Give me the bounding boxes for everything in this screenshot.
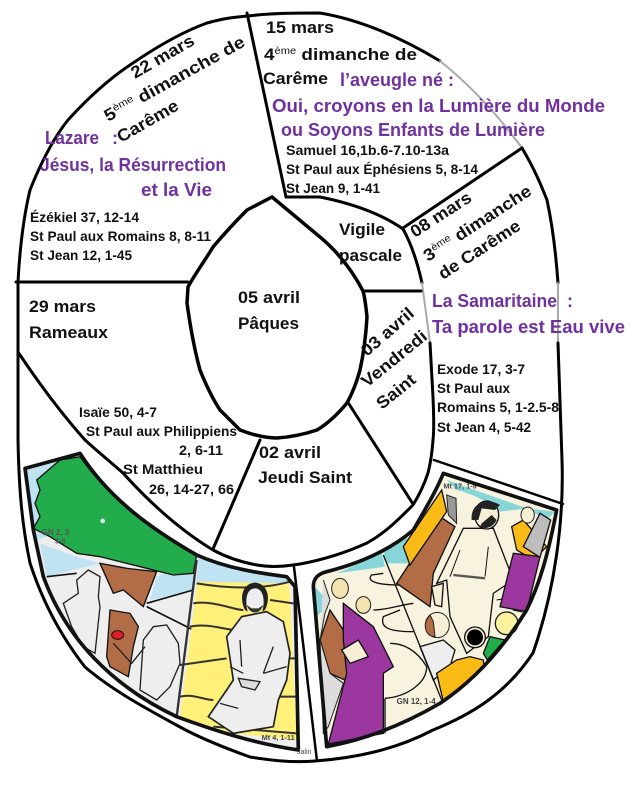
center label: 05 avril Pâques: Pâques bbox=[238, 314, 299, 333]
segment: 03 avril Vendredi Saint: Saint bbox=[373, 370, 420, 413]
segment: 15 mars: Carême bbox=[263, 69, 328, 88]
illustration: Adam and Eve, temptation of Jesus: 3-5 bbox=[55, 536, 66, 545]
segment: 15 mars: 4 bbox=[264, 45, 273, 64]
segment: 15 mars: 15 mars bbox=[266, 18, 334, 37]
segment: 22 mars: : bbox=[112, 128, 118, 148]
segment: 15 mars: ème bbox=[275, 46, 297, 57]
segment: 22 mars: St Jean 12, 1-45 bbox=[30, 247, 132, 263]
segment: 08 mars: St Jean 4, 5-42 bbox=[437, 419, 531, 435]
segment: 08 mars: 3 bbox=[420, 244, 438, 265]
segment: 08 mars: Ta parole est Eau vive bbox=[432, 317, 625, 337]
segment: 22 mars: et la Vie bbox=[141, 180, 212, 200]
tree trunk bbox=[100, 563, 157, 677]
sky bbox=[27, 457, 290, 600]
Elijah bbox=[512, 520, 547, 560]
segment: 08 mars bbox=[407, 181, 625, 435]
segment: Vigile pascale: pascale bbox=[339, 246, 402, 265]
segment: 15 mars: St Jean 9, 1-41 bbox=[286, 180, 380, 196]
segment: 29 mars Rameaux: Rameaux bbox=[29, 323, 109, 342]
segment: 22 mars: 5 bbox=[101, 104, 118, 125]
path lines bbox=[370, 573, 427, 733]
Adam bbox=[63, 570, 100, 653]
Eve bbox=[140, 625, 180, 700]
center label: 05 avril Pâques: 05 avril bbox=[238, 288, 300, 307]
illustration: Transfiguration and call of Abraham: GN 12, 1-4 bbox=[397, 697, 436, 706]
segment: 22 mars: Jésus, la Résurrection bbox=[40, 155, 226, 175]
segment: 08 mars: Romains 5, 1-2.5-8 bbox=[437, 399, 559, 415]
Moses bbox=[397, 517, 455, 607]
center label: 05 avril Pâques bbox=[238, 288, 300, 333]
Jesus robe bbox=[437, 528, 513, 653]
segment: 22 mars: Ézékiel 37, 12-14 bbox=[30, 209, 139, 225]
segment: 29 mars Rameaux: Isaïe 50, 4-7 bbox=[79, 404, 157, 420]
segment: 08 mars: dimanche bbox=[447, 181, 535, 248]
teal sky bbox=[315, 480, 555, 617]
segment: 15 mars: l’aveugle né : bbox=[340, 70, 454, 90]
illustration: Adam and Eve, temptation of Jesus: Mt 4, 1-11 bbox=[262, 733, 295, 742]
hills bbox=[47, 573, 193, 630]
segment: 08 mars: La Samaritaine bbox=[432, 291, 557, 311]
illustration: Transfiguration and call of Abraham bbox=[313, 473, 557, 747]
segment: 29 mars Rameaux bbox=[29, 297, 237, 497]
apple bbox=[112, 631, 124, 639]
center circle: Pâques bbox=[187, 197, 367, 438]
segment: 29 mars Rameaux: 29 mars bbox=[29, 297, 96, 316]
segment: 02 avril Jeudi Saint bbox=[258, 443, 352, 487]
segment: 22 mars: Carême bbox=[114, 96, 182, 146]
segment: 29 mars Rameaux: 26, 14-27, 66 bbox=[149, 481, 234, 497]
panel border bbox=[25, 453, 298, 750]
illustration: Transfiguration and call of Abraham: Mt 17, 1-9 bbox=[443, 481, 477, 490]
segment: 03 avril Vendredi Saint bbox=[357, 304, 431, 413]
segment: 22 mars: St Paul aux Romains 8, 8-11 bbox=[30, 228, 211, 244]
segment: 29 mars Rameaux: St Matthieu bbox=[123, 461, 203, 477]
segment: 08 mars: St Paul aux bbox=[437, 380, 510, 396]
segment: 08 mars: ème bbox=[429, 233, 454, 254]
segment: 03 avril Vendredi Saint: 03 avril bbox=[357, 304, 418, 360]
panel border bbox=[313, 473, 557, 747]
Abraham bbox=[320, 610, 348, 682]
segment: Vigile pascale bbox=[339, 220, 402, 265]
disciples bbox=[420, 640, 455, 680]
segment: 29 mars Rameaux: 2, 6-11 bbox=[179, 442, 223, 458]
segment: 02 avril Jeudi Saint: Jeudi Saint bbox=[258, 468, 352, 487]
yellow ground bbox=[180, 582, 297, 740]
segment: 22 mars: dimanche de bbox=[130, 32, 248, 109]
segment: 15 mars bbox=[263, 18, 605, 196]
segment: Vigile pascale: Vigile bbox=[339, 220, 385, 239]
segment: 15 mars: Samuel 16,1b.6-7.10-13a bbox=[286, 142, 449, 158]
segment: 22 mars: 22 mars bbox=[128, 31, 198, 82]
segment: 08 mars: : bbox=[567, 291, 573, 311]
Jesus seated bbox=[208, 612, 290, 733]
vertical panel divider bbox=[383, 555, 442, 700]
segment: 08 mars: Exode 17, 3-7 bbox=[437, 361, 525, 377]
segment: 22 mars: ème bbox=[111, 93, 136, 114]
segment: 15 mars: St Paul aux Éphésiens 5, 8-14 bbox=[286, 161, 478, 177]
segment: 22 mars bbox=[30, 31, 248, 263]
illustration: Adam and Eve, temptation of Jesus bbox=[25, 453, 298, 750]
segment: 15 mars: ou Soyons Enfants de Lumière bbox=[281, 120, 545, 140]
segment: 29 mars Rameaux: St Paul aux Philippiens bbox=[86, 423, 237, 439]
artist signature: Jalin bbox=[297, 749, 312, 756]
tree foliage bbox=[33, 457, 197, 575]
segment: 02 avril Jeudi Saint: 02 avril bbox=[259, 443, 321, 462]
segment: 03 avril Vendredi Saint: Vendredi bbox=[358, 327, 431, 391]
segment: 08 mars: 08 mars bbox=[407, 188, 475, 241]
segment: 15 mars: Oui, croyons en la Lumière du Monde bbox=[272, 96, 605, 116]
illustration: Adam and Eve, temptation of Jesus: GN 2, 3 bbox=[42, 528, 70, 537]
segment: 15 mars: dimanche de bbox=[296, 45, 417, 64]
segment: 22 mars: Lazare bbox=[45, 128, 99, 148]
segment: 08 mars: de Carême bbox=[435, 216, 524, 283]
